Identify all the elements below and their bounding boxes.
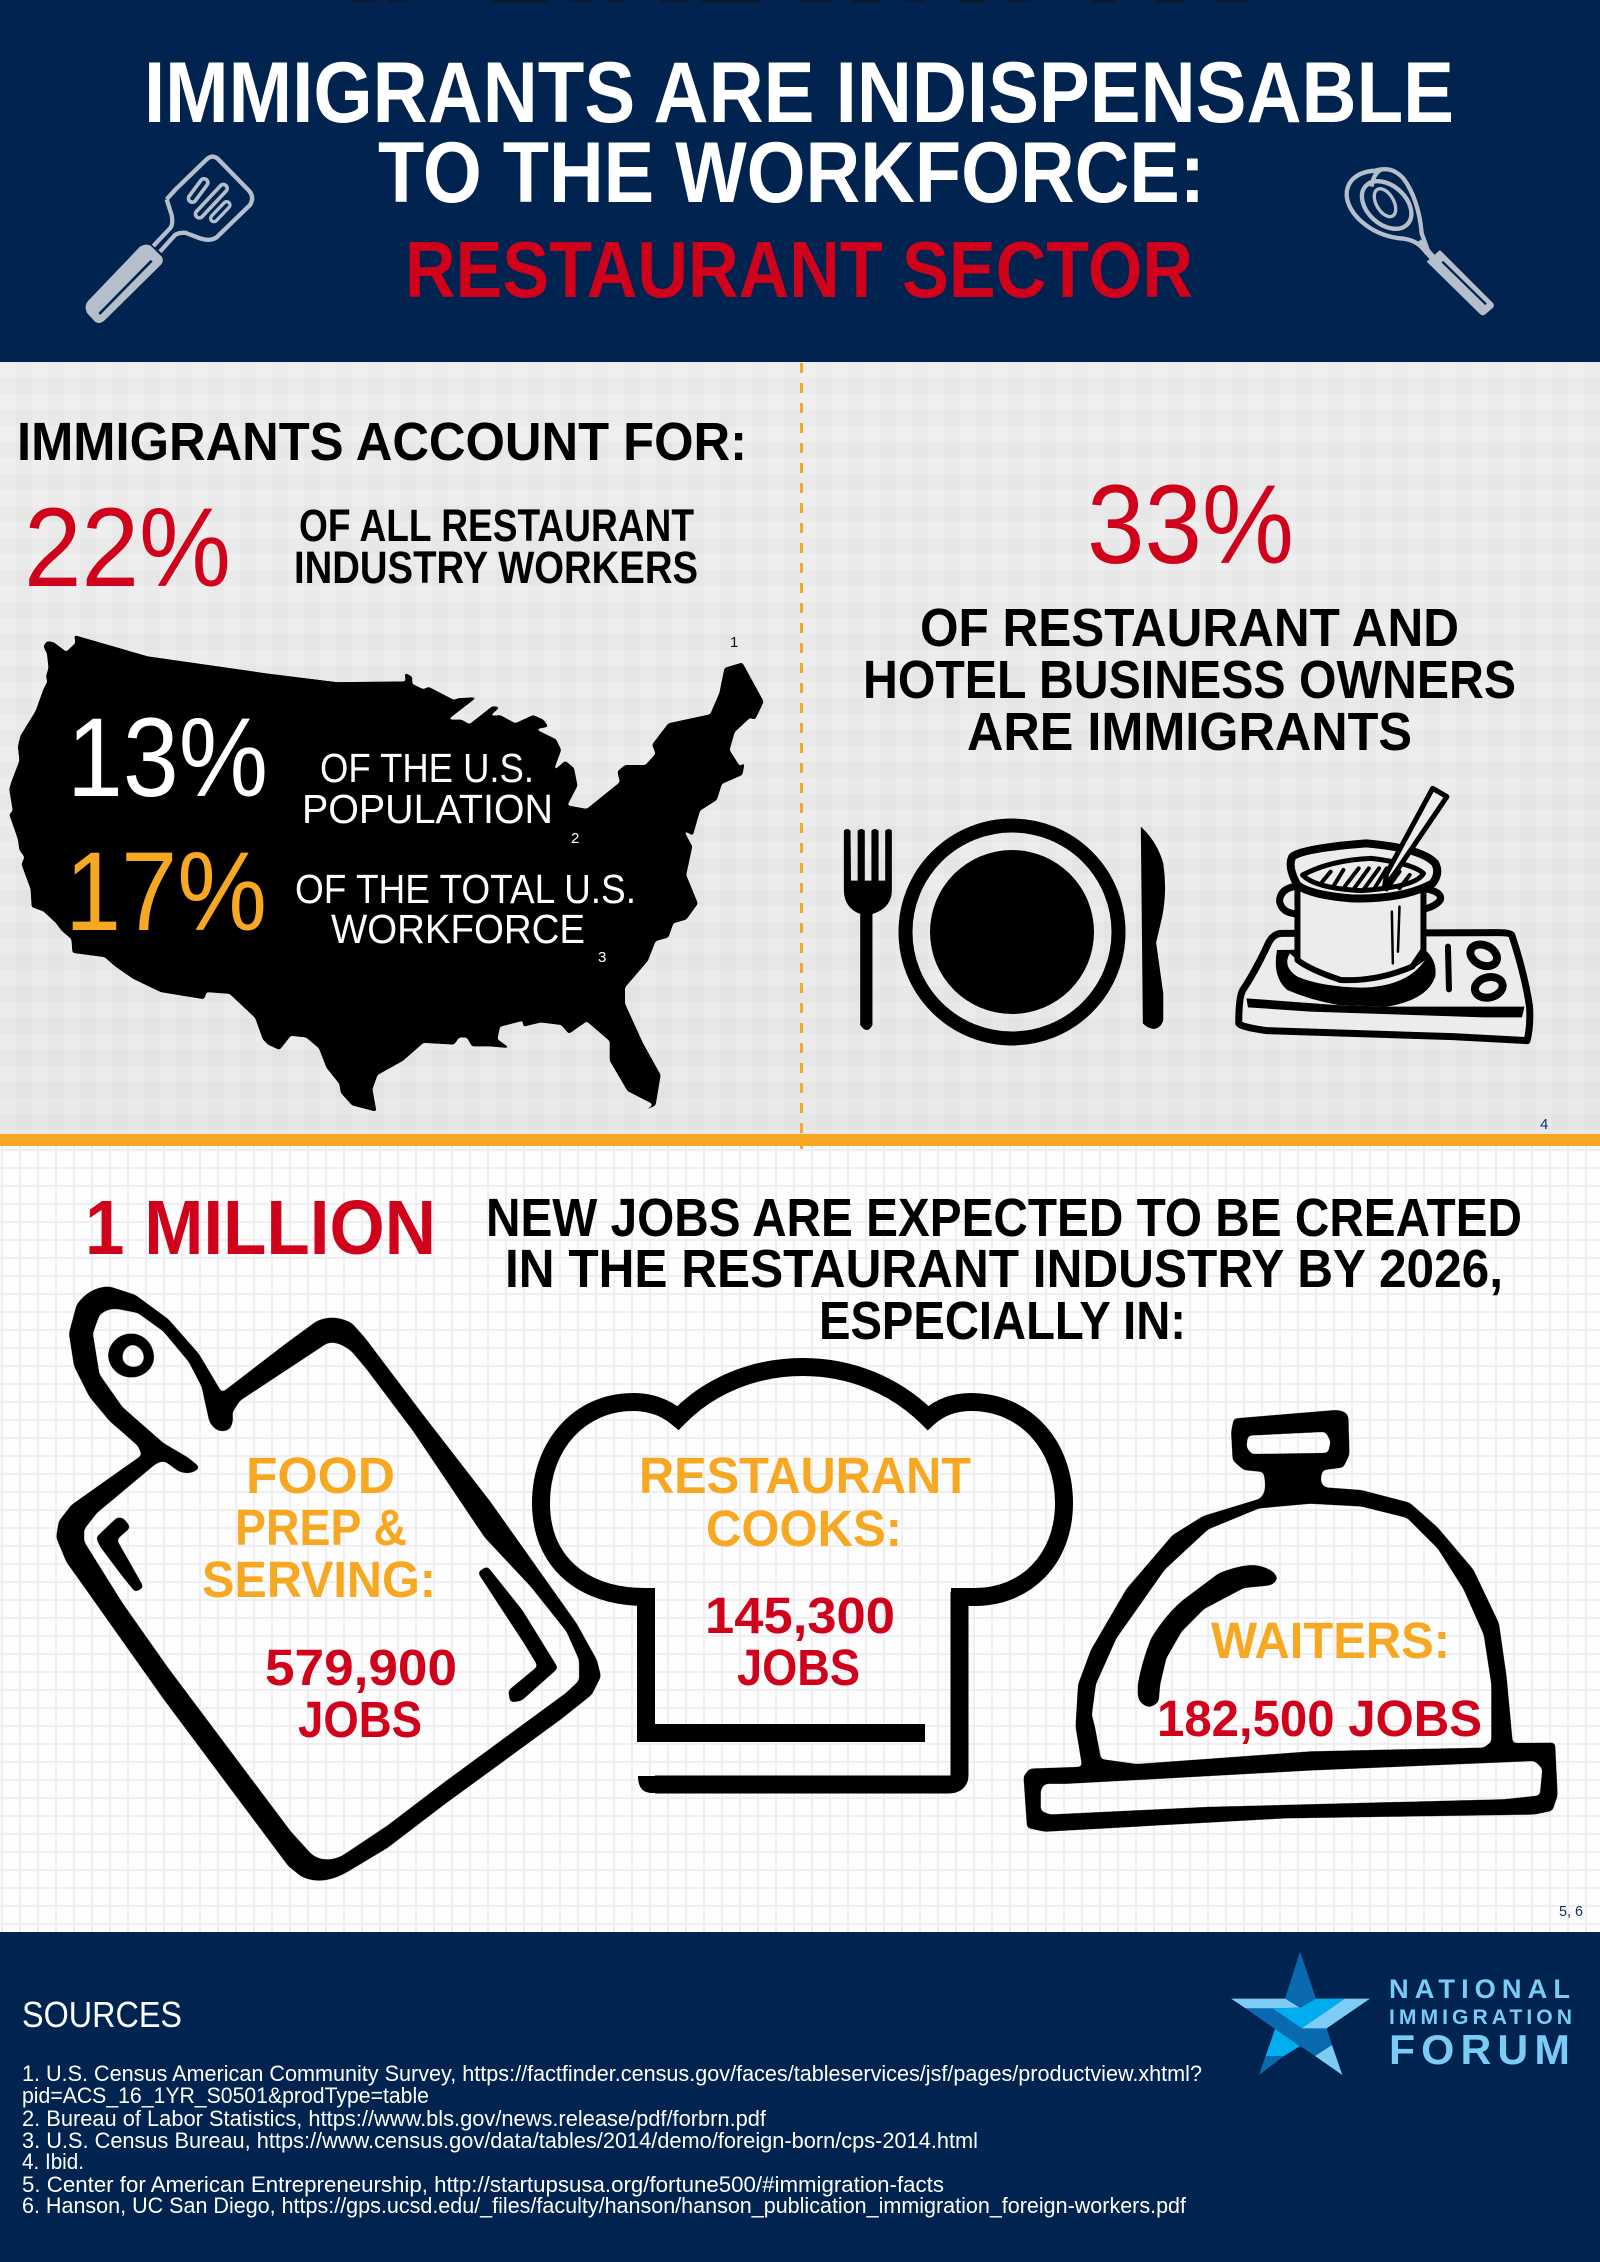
icon: star	[1231, 1952, 1370, 2075]
footnote 4: 4	[1540, 1116, 1548, 1133]
stat label: workforce	[295, 866, 636, 952]
panel: header	[0, 0, 1600, 362]
subtitle: RESTAURANT SECTOR	[405, 225, 1193, 314]
label: food prep and serving: PREP &	[235, 1499, 407, 1556]
stat label: owners: ARE IMMIGRANTS	[967, 702, 1412, 762]
stat label: workforce: WORKFORCE	[331, 906, 585, 952]
stat label: population: POPULATION	[302, 786, 553, 832]
logo wordmark: IMMIGRATION	[1389, 2006, 1576, 2029]
icon: serving cloche	[1023, 1410, 1558, 1832]
footnotes 5 and 6: 5, 6	[1559, 1903, 1583, 1920]
label: restaurant cooks: COOKS:	[706, 1500, 902, 1557]
footnote 1: 1	[730, 634, 738, 651]
label: waiters: WAITERS:	[1211, 1612, 1450, 1669]
icon: pot on stove	[1239, 788, 1530, 1041]
title line 1: IMMIGRANTS ARE INDISPENSABLE	[144, 45, 1454, 141]
label: restaurant cooks: JOBS	[737, 1639, 860, 1696]
label: food prep and serving: 579,900	[265, 1639, 457, 1696]
stat: 17 percent: 17%	[65, 829, 267, 954]
list: sources	[22, 2061, 1202, 2218]
list: sources: 3. U.S. Census Bureau, https://www.census.gov/data/tables/2014/demo/foreign-born/cps-2014.html	[22, 2128, 978, 2153]
stat: 1 million: 1 MILLION	[85, 1185, 436, 1271]
list: sources: 6. Hanson, UC San Diego, https://gps.ucsd.edu/_files/faculty/hanson/hanson_publication_immigration_foreign-workers.pdf	[22, 2193, 1187, 2218]
label: food prep and serving: JOBS	[298, 1691, 422, 1748]
icon: fork, plate and knife	[844, 826, 1165, 1038]
list: sources: 1. U.S. Census American Community Survey, https://factfinder.census.gov/faces/tableservices/jsf/pages/productview.xhtml?	[22, 2061, 1202, 2086]
panel: plaid statistics background	[0, 362, 1600, 1134]
label: food prep and serving: SERVING:	[202, 1551, 436, 1608]
footnote 2: 2	[571, 830, 579, 847]
label: restaurant cooks	[639, 1447, 971, 1696]
logo: National Immigration Forum	[1231, 1952, 1576, 2075]
icon: spatula	[86, 157, 252, 323]
orange divider band	[0, 1134, 1600, 1146]
heading: new jobs expected: ESPECIALLY IN:	[819, 1291, 1186, 1351]
stat label: restaurant workers: INDUSTRY WORKERS	[294, 542, 698, 593]
title line 2: TO THE WORKFORCE:	[378, 125, 1205, 221]
heading: new jobs expected: IN THE RESTAURANT INDUSTRY BY 2026,	[505, 1239, 1503, 1299]
panel: new jobs	[56, 1185, 1583, 1920]
stat label: population	[302, 745, 553, 832]
label: food prep and serving	[202, 1447, 457, 1748]
stat label: restaurant workers: OF ALL RESTAURANT	[299, 500, 694, 551]
list: sources: 5. Center for American Entrepreneurship, http://startupsusa.org/fortune500/#immigration-facts	[22, 2172, 944, 2197]
panel: business owners	[844, 462, 1548, 1133]
stat: 33 percent: 33%	[1087, 462, 1294, 587]
map: United States silhouette	[9, 635, 764, 1117]
list: sources: 4. Ibid.	[22, 2149, 84, 2174]
heading: new jobs expected	[486, 1188, 1522, 1351]
stat label: restaurant workers	[294, 500, 698, 593]
panel: footer	[0, 1932, 1600, 2262]
list: sources: pid=ACS_16_1YR_S0501&prodType=table	[22, 2083, 429, 2108]
label: waiters: 182,500 JOBS	[1157, 1690, 1482, 1747]
stat label: owners: HOTEL BUSINESS OWNERS	[863, 650, 1516, 710]
panel: grid jobs background	[0, 1146, 1600, 1932]
label: restaurant cooks: 145,300	[705, 1587, 895, 1644]
icon: cutting board	[56, 1287, 601, 1881]
heading: sources: SOURCES	[22, 1994, 182, 2035]
label: restaurant cooks: RESTAURANT	[639, 1447, 971, 1504]
label: food prep and serving: FOOD	[246, 1447, 395, 1504]
stat label: workforce: OF THE TOTAL U.S.	[295, 866, 636, 912]
label: waiters	[1157, 1612, 1482, 1747]
stat: 22 percent: 22%	[24, 485, 231, 610]
list: sources: 2. Bureau of Labor Statistics, https://www.bls.gov/news.release/pdf/forbrn.pdf	[22, 2106, 767, 2131]
logo wordmark: FORUM	[1389, 2026, 1576, 2073]
logo wordmark	[1389, 1974, 1576, 2073]
logo wordmark: NATIONAL	[1389, 1974, 1576, 2004]
heading: IMMIGRANTS ACCOUNT FOR:	[17, 412, 747, 472]
stat label: owners: OF RESTAURANT AND	[920, 598, 1459, 658]
icon: whisk	[1347, 169, 1494, 315]
stat label: owners	[863, 598, 1516, 762]
stat: 13 percent: 13%	[67, 695, 268, 820]
footnote 3: 3	[598, 949, 606, 966]
panel: immigrants account for	[9, 412, 764, 1117]
stat label: population: OF THE U.S.	[320, 745, 534, 791]
icon: chef hat	[541, 1367, 1064, 1793]
